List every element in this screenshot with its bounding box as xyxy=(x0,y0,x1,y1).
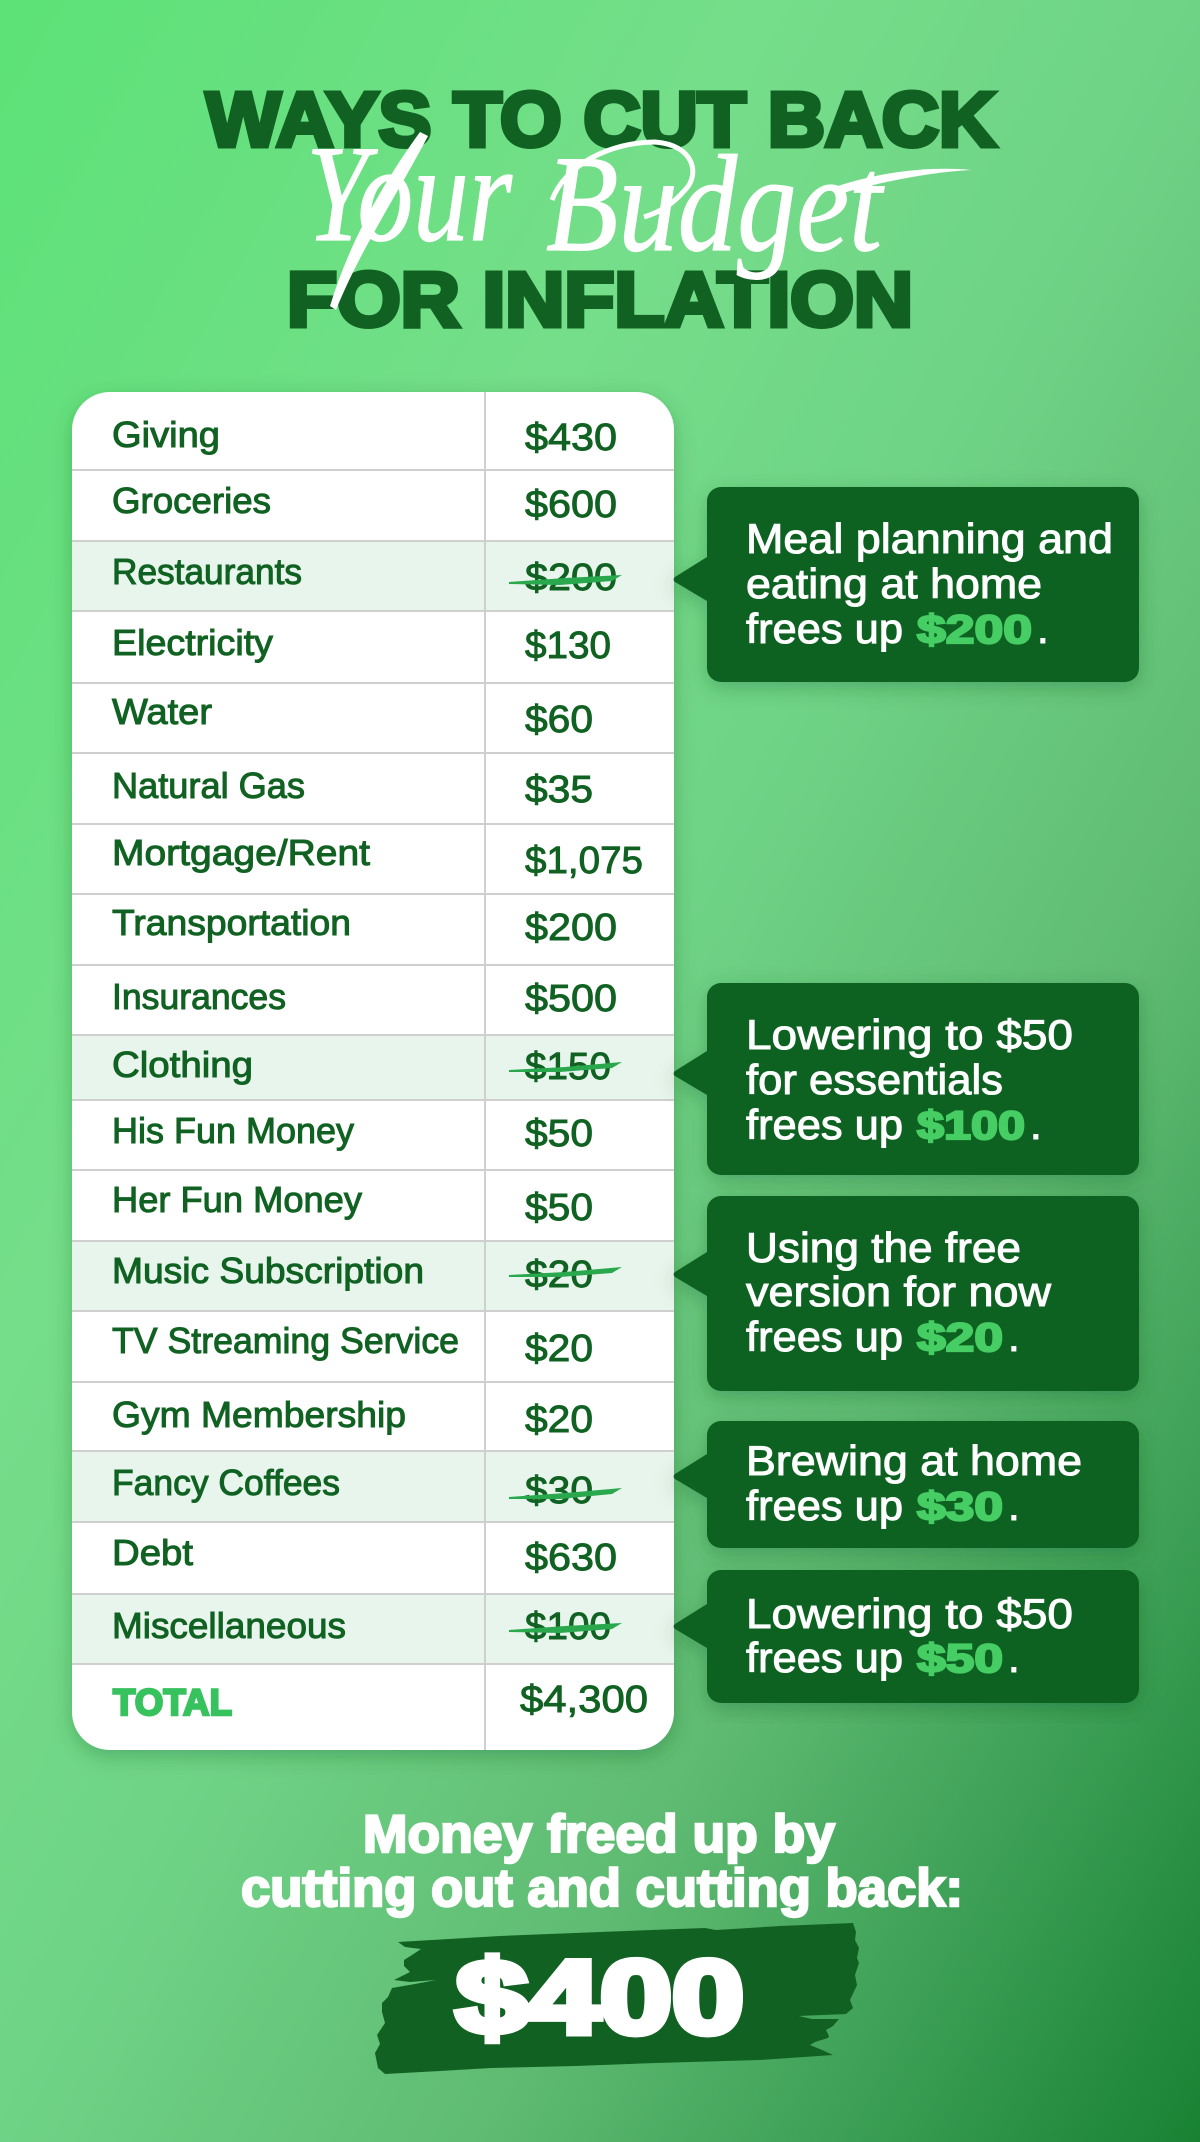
script title: your budget: Budget xyxy=(546,127,885,280)
row amounts: $130 xyxy=(525,625,611,667)
row amounts: $200 xyxy=(525,557,617,599)
row labels: Music Subscription xyxy=(112,1250,424,1291)
row amounts: $20 xyxy=(525,1254,593,1296)
row amounts xyxy=(520,417,648,1721)
title xyxy=(206,77,996,343)
row labels: His Fun Money xyxy=(112,1110,354,1151)
panel: budget table xyxy=(72,392,674,1750)
row labels: TOTAL xyxy=(113,1682,232,1723)
callout: clothing: frees up xyxy=(746,1101,903,1148)
callout: music subscription: . xyxy=(1008,1313,1020,1360)
row labels: Restaurants xyxy=(112,551,302,592)
callout: restaurants: frees up xyxy=(746,605,903,652)
title line: for inflation: FOR INFLATION xyxy=(287,257,913,343)
row amounts: $500 xyxy=(525,978,617,1020)
callout: restaurants: . xyxy=(1037,605,1049,652)
row amounts: $200 xyxy=(525,907,617,949)
callout: fancy coffees: $30 xyxy=(917,1485,1003,1529)
row amounts: $1,075 xyxy=(525,840,643,882)
row amounts: $50 xyxy=(525,1187,593,1229)
row labels: Her Fun Money xyxy=(112,1179,362,1220)
summary heading: Money freed up by xyxy=(363,1805,836,1864)
row labels: Insurances xyxy=(112,976,286,1017)
callout: music subscription: Using the free xyxy=(746,1224,1021,1271)
row labels: Electricity xyxy=(112,622,273,663)
summary heading xyxy=(241,1805,963,1918)
callout: music subscription: version for now xyxy=(746,1268,1052,1315)
title line: ways to cut back: WAYS TO CUT BACK xyxy=(206,77,996,163)
callout: fancy coffees: . xyxy=(1008,1482,1020,1529)
row amounts: $150 xyxy=(525,1046,611,1088)
row amounts: $50 xyxy=(525,1113,593,1155)
row amounts: $20 xyxy=(525,1399,593,1441)
row labels: TV Streaming Service xyxy=(112,1320,459,1361)
total badge: $400 on brush stroke xyxy=(375,1923,859,2074)
row amounts: $20 xyxy=(525,1328,593,1370)
row amounts: $30 xyxy=(525,1470,593,1512)
callout: restaurants: $200 xyxy=(917,608,1032,652)
callout: music subscription: $20 xyxy=(917,1316,1003,1360)
callout: clothing: $100 xyxy=(917,1104,1025,1148)
callout: music subscription xyxy=(674,1196,1139,1391)
row labels: Gym Membership xyxy=(112,1394,406,1435)
callout: clothing xyxy=(674,983,1139,1175)
row labels: Groceries xyxy=(112,480,271,521)
callout: music subscription: frees up xyxy=(746,1313,903,1360)
script title: your budget: Your xyxy=(306,117,513,270)
callout: fancy coffees: frees up xyxy=(746,1482,903,1529)
row labels: Transportation xyxy=(112,902,351,943)
row amounts: $430 xyxy=(525,417,617,459)
script title: your budget xyxy=(306,117,971,310)
row amounts: $600 xyxy=(525,484,617,526)
row amounts: $100 xyxy=(525,1606,611,1648)
row labels: Mortgage/Rent xyxy=(112,832,370,873)
callout: fancy coffees: Brewing at home xyxy=(746,1437,1082,1484)
callout: miscellaneous: Lowering to $50 xyxy=(746,1590,1073,1637)
callout: clothing: for essentials xyxy=(746,1056,1003,1103)
row amounts: $630 xyxy=(525,1537,617,1579)
callout: clothing: Lowering to $50 xyxy=(746,1011,1073,1058)
row labels xyxy=(112,414,459,1723)
callout: fancy coffees xyxy=(674,1421,1139,1548)
row labels: Water xyxy=(112,691,212,732)
row labels: Natural Gas xyxy=(112,765,305,806)
callout: miscellaneous: $50 xyxy=(917,1637,1003,1681)
strikethrough marks xyxy=(509,575,622,1633)
callout: clothing: . xyxy=(1030,1101,1042,1148)
amount: $400 xyxy=(456,1940,744,2056)
callout: restaurants: eating at home xyxy=(746,560,1042,607)
callout: restaurants xyxy=(674,487,1139,682)
row labels: Debt xyxy=(112,1532,193,1573)
row labels: Clothing xyxy=(112,1044,253,1085)
row amounts: $35 xyxy=(525,769,593,811)
row labels: Fancy Coffees xyxy=(112,1462,340,1503)
brush stroke xyxy=(375,1923,859,2074)
callout: miscellaneous xyxy=(674,1570,1139,1703)
summary heading: cutting out and cutting back: xyxy=(241,1859,963,1918)
row amounts: $4,300 xyxy=(520,1679,648,1721)
callout: miscellaneous: . xyxy=(1008,1634,1020,1681)
row labels: Miscellaneous xyxy=(112,1605,346,1646)
row amounts: $60 xyxy=(525,699,593,741)
callout: miscellaneous: frees up xyxy=(746,1634,903,1681)
callout: restaurants: Meal planning and xyxy=(746,515,1113,562)
row labels: Giving xyxy=(112,414,220,455)
